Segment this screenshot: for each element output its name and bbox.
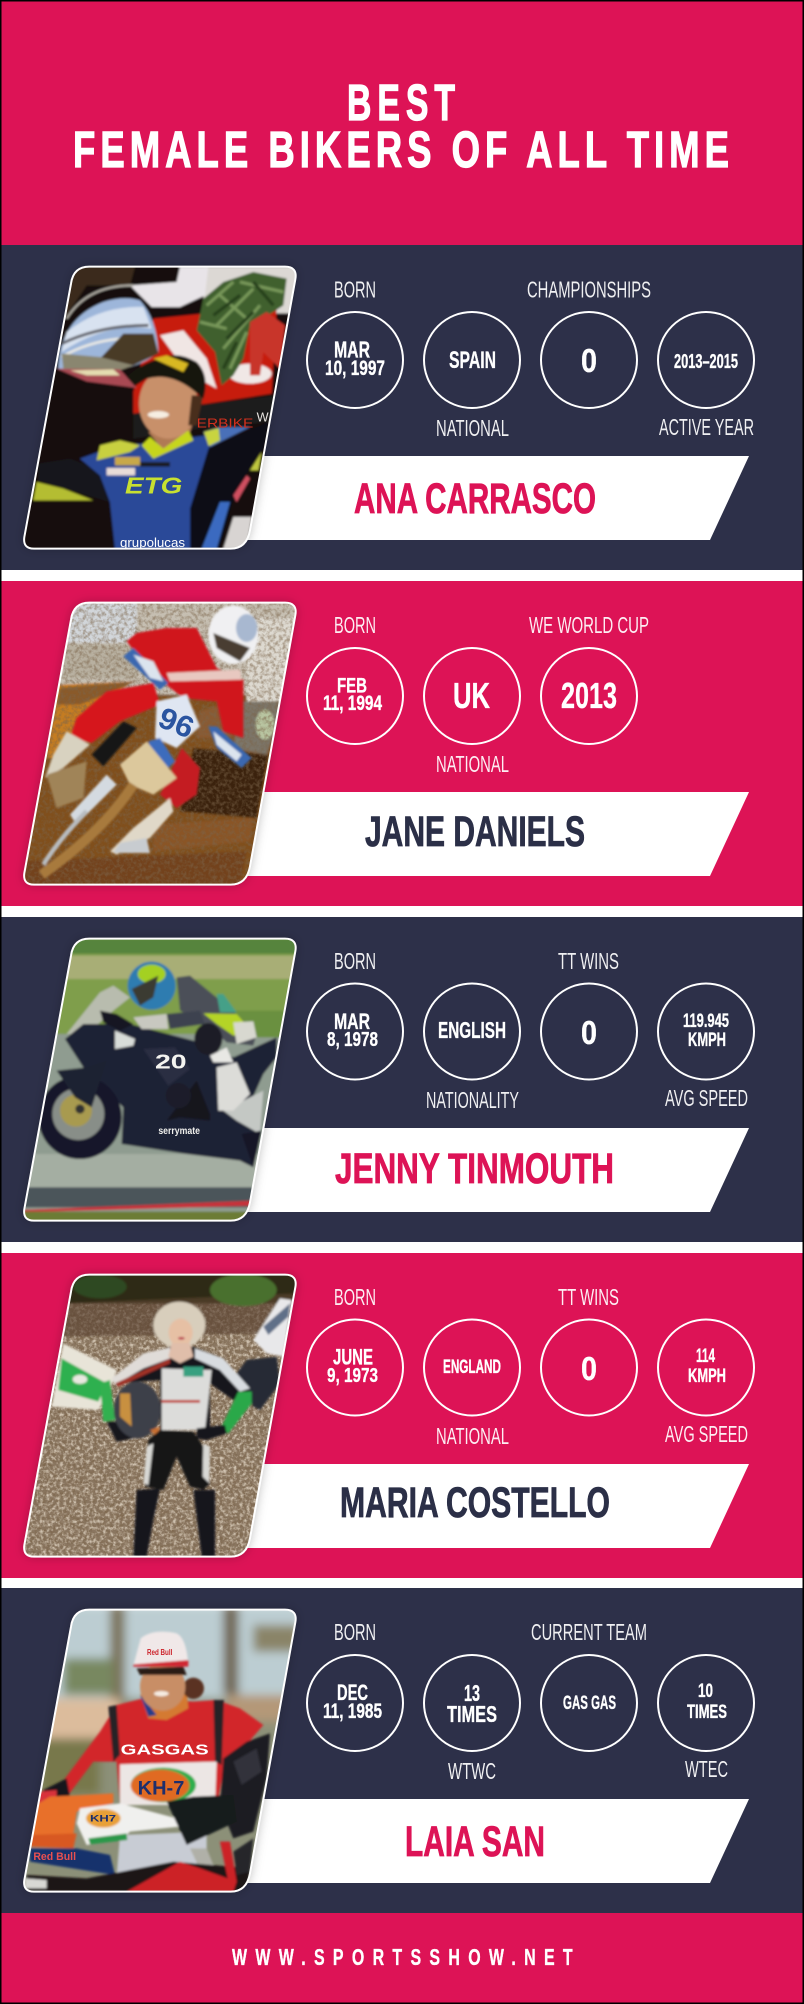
photo: road racing motorcycle [20, 934, 300, 1226]
stat: average speed: KMPH [688, 1366, 726, 1387]
stat: born: 9, 1973 [327, 1364, 378, 1387]
stat: WTWC: TIMES [447, 1701, 497, 1727]
stat: championships: CHAMPIONSHIPS [527, 276, 651, 302]
stat: average speed: AVG SPEED [665, 1421, 748, 1447]
stat: born: BORN [334, 276, 376, 302]
stat: average speed [658, 984, 754, 1111]
photo: rider with rally bike: KH7 [90, 1814, 116, 1824]
stat: born: JUNE [333, 1344, 373, 1370]
photo: rider with rally bike: Red Bull [33, 1851, 76, 1863]
photo: rider holding trophy: grupolucas [120, 535, 185, 550]
photo: road racing motorcycle: 20 [155, 1050, 187, 1073]
photo: rider holding trophy [20, 262, 300, 554]
stat: WTWC: 13 [464, 1680, 480, 1706]
stat: national [424, 1320, 520, 1449]
stat: average speed [658, 1320, 754, 1447]
stat: TT wins: TT WINS [558, 948, 619, 974]
stat: born [307, 1284, 403, 1416]
photo: motocross rider [20, 598, 300, 890]
stat: nationality [424, 984, 520, 1113]
stat: national: NATIONAL [436, 751, 509, 777]
stat: championships [527, 276, 651, 408]
name banner: LAIA SAN [405, 1818, 545, 1866]
stat: born [307, 1619, 403, 1751]
title [73, 74, 734, 178]
header panel [0, 0, 804, 245]
stat: born: BORN [334, 1619, 376, 1645]
stat: national: SPAIN [449, 347, 496, 374]
stat: born: 11, 1985 [323, 1699, 382, 1723]
name banner: JANE DANIELS [365, 808, 585, 856]
stat: active year [658, 312, 754, 440]
stat: current team: GAS GAS [563, 1693, 616, 1714]
name banner [200, 1464, 749, 1548]
panel: Maria Costello [0, 1253, 804, 1578]
stat: born: BORN [334, 1284, 376, 1310]
stat: championships: 0 [581, 342, 597, 379]
stat: born [307, 276, 403, 408]
stat: born: BORN [334, 612, 376, 638]
stat: TT wins [541, 948, 637, 1080]
stat: average speed: 119.945 [683, 1011, 729, 1032]
stat: WTEC: 10 [698, 1681, 713, 1702]
stat: born [307, 612, 403, 744]
footer [0, 1913, 804, 2004]
stat: current team: CURRENT TEAM [531, 1619, 647, 1645]
stat: average speed: AVG SPEED [665, 1085, 748, 1111]
photo: motocross rider: 96 [154, 702, 198, 745]
stat: born: MAR [334, 336, 370, 362]
photo: rider holding trophy: ETG [125, 473, 182, 499]
name banner [200, 1799, 749, 1883]
stat: WTEC: TIMES [687, 1702, 727, 1723]
photo: rider with rally bike: Red Bull [147, 1648, 172, 1657]
stat: WTWC [424, 1655, 520, 1784]
stat: national: NATIONAL [436, 1423, 509, 1449]
stat: nationality: NATIONALITY [426, 1087, 519, 1113]
panel: Jane Daniels [0, 581, 804, 906]
stat: national: ENGLAND [443, 1357, 501, 1378]
stat: TT wins: 0 [581, 1350, 597, 1387]
panel: Jenny Tinmouth [0, 917, 804, 1242]
stat: WE world cup: WE WORLD CUP [529, 612, 649, 638]
stat: current team [531, 1619, 647, 1751]
stat: WE world cup: 2013 [561, 675, 617, 716]
panel: Laia San [0, 1588, 804, 1913]
stat: national [424, 312, 520, 441]
footer: WWW.SPORTSSHOW.NET [232, 1944, 581, 1970]
stat: born: FEB [337, 674, 367, 698]
stat: TT wins: 0 [581, 1014, 597, 1051]
stat: national: NATIONAL [436, 415, 509, 441]
stat: average speed: 114 [696, 1346, 715, 1367]
photo: road racing motorcycle: serrymate [158, 1126, 200, 1137]
stat: born: 10, 1997 [325, 357, 385, 380]
stat: WTWC: WTWC [448, 1758, 496, 1784]
stat: born: DEC [337, 1680, 368, 1705]
stat: born: 11, 1994 [323, 692, 382, 715]
panel: Ana Carrasco [0, 245, 804, 570]
photo: rider with rally bike: KH-7 [138, 1778, 184, 1799]
title: BEST [347, 74, 461, 131]
stat: national [424, 648, 520, 777]
photo: rider holding trophy: ERBIKE [197, 416, 253, 430]
stat: born: BORN [334, 948, 376, 974]
name banner: JENNY TINMOUTH [335, 1145, 614, 1193]
photo: rider with rally bike: GASGAS [121, 1742, 209, 1758]
name banner [200, 792, 749, 876]
name banner: ANA CARRASCO [354, 475, 596, 523]
stat: active year: 2013–2015 [674, 351, 738, 373]
stat: WTEC [658, 1655, 754, 1782]
stat: WE world cup [529, 612, 649, 744]
stat: born [307, 948, 403, 1080]
stat: nationality: ENGLISH [438, 1017, 506, 1043]
photo: rider with rally bike [20, 1605, 300, 1897]
stat: born: 8, 1978 [327, 1028, 378, 1051]
stat: TT wins: TT WINS [558, 1284, 619, 1310]
photo: rider holding trophy: W [257, 410, 269, 424]
name banner [200, 456, 749, 540]
stat: national: UK [453, 675, 490, 716]
photo: rider standing in autumn leaves [20, 1270, 300, 1562]
stat: TT wins [541, 1284, 637, 1416]
stat: average speed: KMPH [688, 1030, 726, 1051]
name banner [200, 1128, 749, 1212]
stat: WTEC: WTEC [685, 1756, 728, 1782]
stat: born: MAR [334, 1009, 370, 1034]
name banner: MARIA COSTELLO [340, 1479, 610, 1527]
